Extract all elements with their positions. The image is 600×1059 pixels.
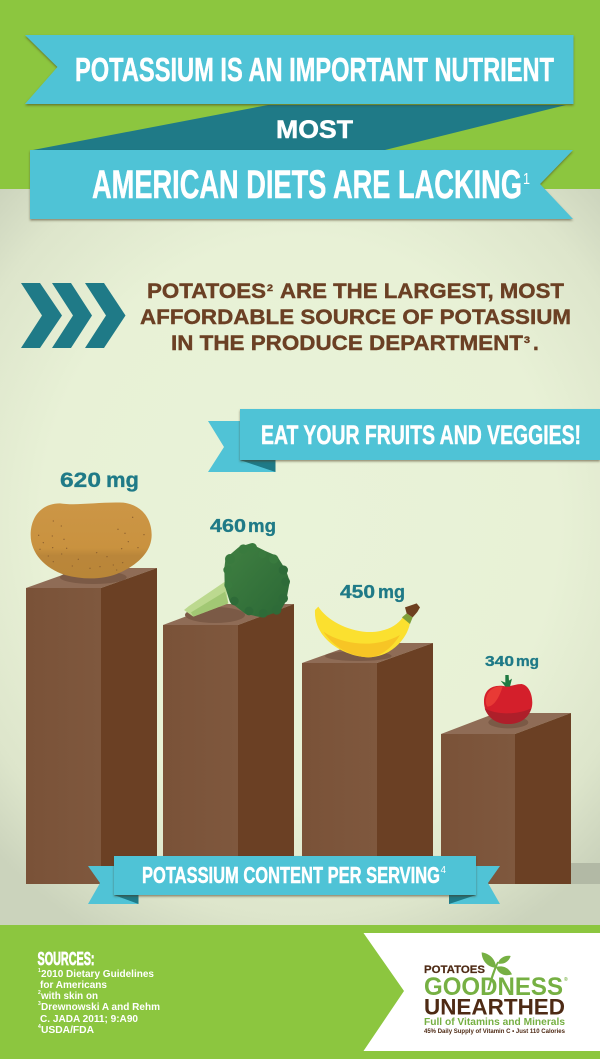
logo: potatoes goodness unearthed: UNEARTHED	[424, 994, 565, 1020]
sources text block: C. JADA 2011; 9:A90	[40, 1014, 138, 1025]
ribbon: potassium content per serving: POTASSIUM CONTENT PER SERVING	[142, 862, 440, 888]
footer band	[0, 925, 600, 1059]
logo: potatoes goodness unearthed: Full of Vitamins and Minerals	[424, 1016, 565, 1028]
column: tomato bar	[441, 713, 571, 884]
text: potatoes statement: 2	[267, 283, 273, 293]
sources text block: USDA/FDA	[41, 1025, 94, 1036]
logo: potatoes goodness unearthed: 45% Daily Supply of Vitamin C • Just 110 Calories	[424, 1029, 566, 1035]
text: potatoes statement: IN THE PRODUCE DEPARTMENT	[171, 332, 523, 355]
label: 620 mg	[60, 469, 139, 492]
column: potato bar	[26, 568, 157, 884]
label: 340 mg: mg	[516, 653, 539, 670]
icon: potato	[31, 503, 152, 584]
top green band	[0, 0, 600, 189]
sources text block: 1	[38, 968, 41, 974]
label: 340 mg: 340	[485, 653, 514, 670]
ribbon: potassium content per serving	[88, 856, 500, 904]
label: 340 mg	[485, 653, 539, 670]
logo: potatoes goodness unearthed: ®	[564, 976, 568, 983]
ribbon fold	[33, 105, 566, 150]
icon: tomato	[484, 675, 532, 728]
sources text block: 2	[38, 990, 41, 996]
icon: triple chevron	[21, 283, 126, 348]
label: 450 mg: 450	[340, 582, 375, 602]
label: 620 mg: mg	[106, 469, 139, 492]
column shadow on floor	[515, 863, 600, 884]
icon: broccoli	[184, 543, 290, 623]
icon: banana	[315, 603, 420, 661]
ribbon: potassium content per serving: 4	[440, 865, 446, 876]
text: potatoes statement: ARE THE LARGEST, MOST	[280, 280, 564, 303]
label: 460 mg: 460	[210, 516, 246, 536]
label: 460 mg	[210, 516, 276, 536]
text: potatoes statement: 3	[524, 335, 530, 345]
icon: sprout	[482, 952, 512, 990]
text: potatoes statement: .	[533, 332, 539, 355]
text: potatoes statement	[140, 280, 571, 355]
label: 450 mg: mg	[378, 582, 405, 602]
sources text block: 2010 Dietary Guidelines	[41, 969, 154, 980]
sources text block: Drewnowski A and Rehm	[41, 1002, 160, 1013]
sources text block: with skin on	[40, 991, 98, 1002]
background	[0, 189, 600, 926]
column: broccoli bar	[163, 604, 294, 884]
word: most: MOST	[276, 116, 353, 144]
text: potatoes statement: AFFORDABLE SOURCE OF POTASSIUM	[140, 306, 571, 329]
logo: potatoes goodness unearthed: POTATOES	[424, 964, 485, 976]
column: banana bar	[302, 643, 433, 884]
white arrow panel	[364, 933, 600, 1051]
ribbon: potassium headline	[25, 35, 574, 104]
sources text block: SOURCES:	[38, 949, 94, 969]
logo: potatoes goodness unearthed	[424, 952, 568, 1035]
sources text block: for Americans	[40, 980, 107, 991]
ribbon: american diets	[30, 150, 573, 219]
label: 460 mg: mg	[248, 516, 276, 536]
text: potatoes statement: POTATOES	[147, 280, 266, 303]
sources text block: 3	[38, 1001, 41, 1007]
sources text block	[38, 949, 160, 1036]
ribbon: eat your fruits and veggies	[208, 409, 600, 472]
label: 450 mg	[340, 582, 405, 602]
ribbon: american diets: 1	[523, 171, 530, 188]
label: 620 mg: 620	[60, 469, 101, 492]
logo: potatoes goodness unearthed: GOODNESS	[424, 973, 563, 1001]
headline ribbons	[25, 35, 574, 219]
sources text block: 4	[38, 1024, 41, 1030]
